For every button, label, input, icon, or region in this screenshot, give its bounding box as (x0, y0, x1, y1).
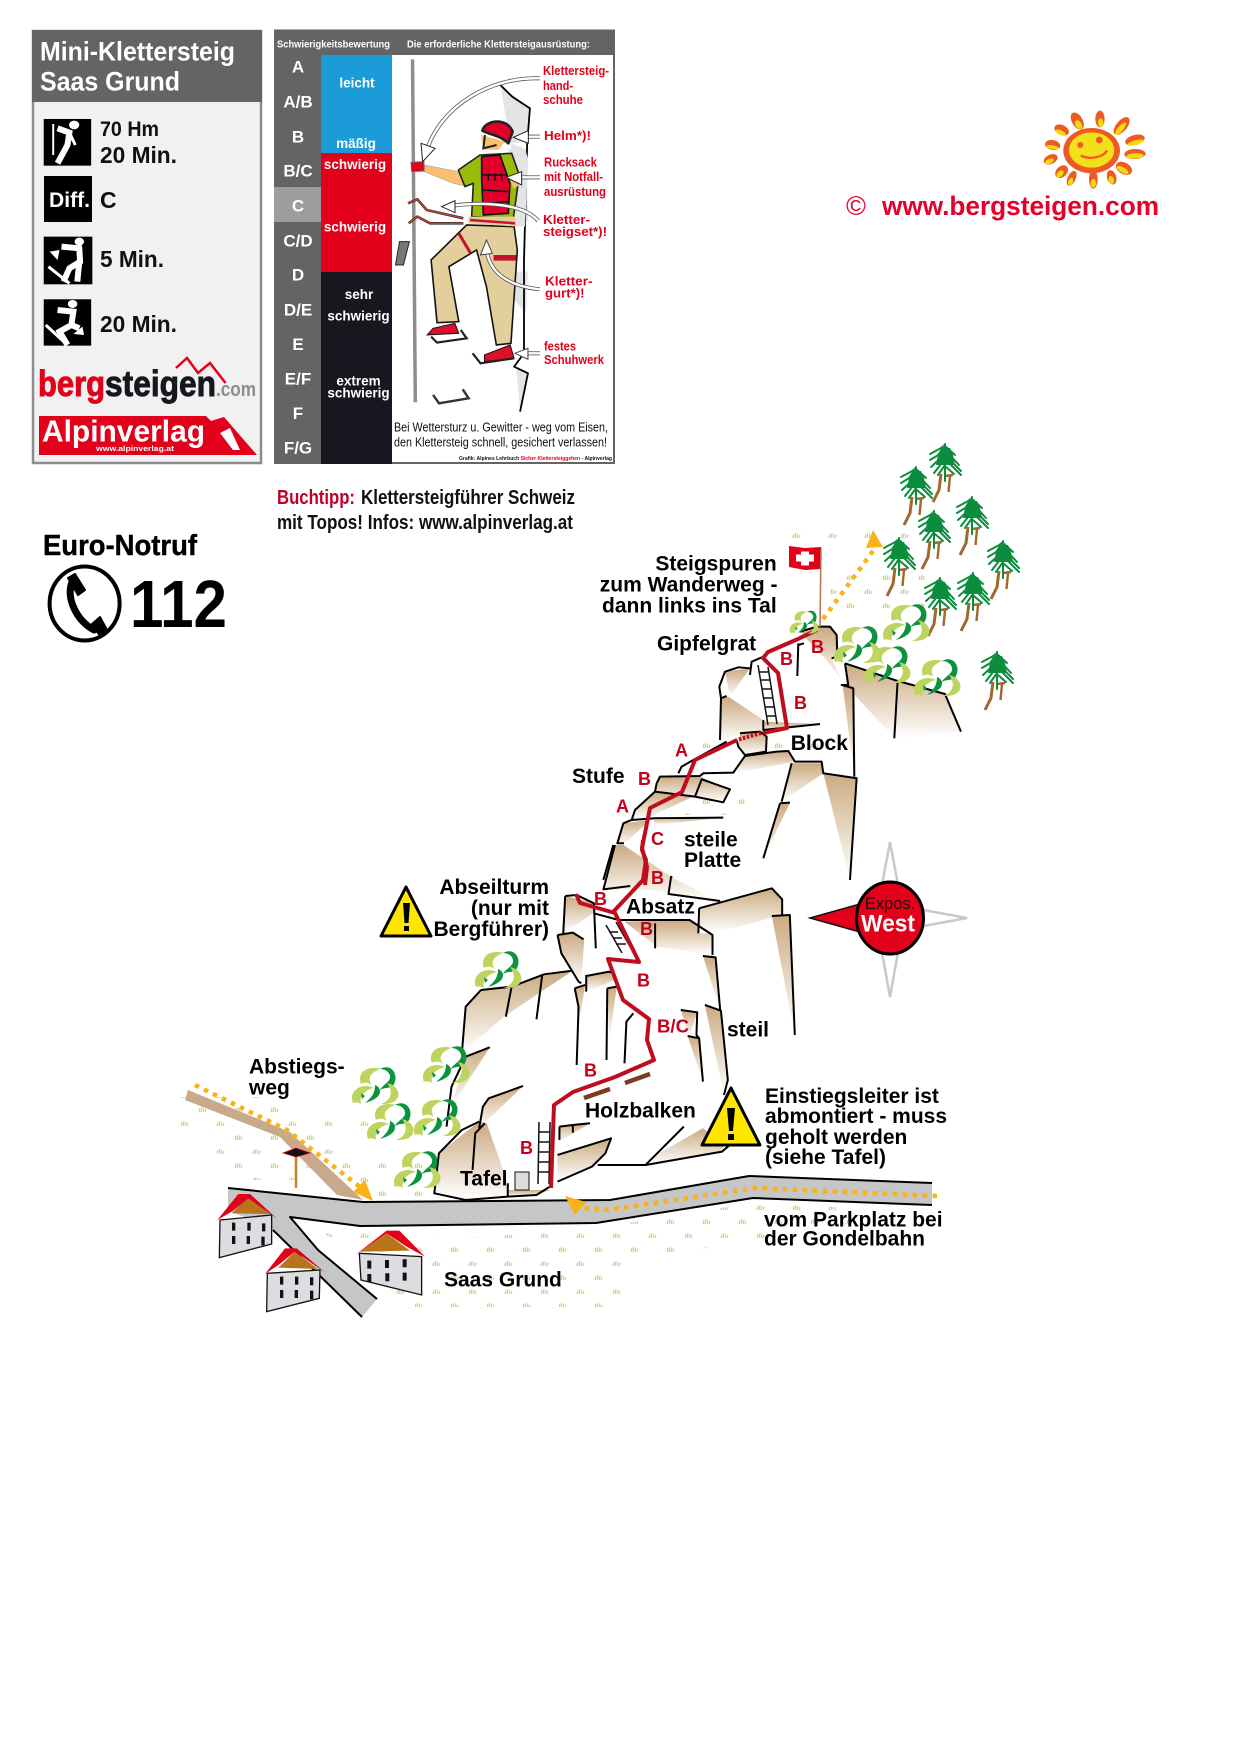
equipment labels: Helm*)! (544, 129, 591, 143)
icon: approach hiker (44, 237, 92, 284)
grade letters: F/G (284, 438, 312, 457)
compass: Expos. (865, 895, 915, 913)
book tip: Buchtipp: (277, 487, 355, 509)
icon: ascent climber (44, 119, 91, 166)
grade letters: E (292, 335, 304, 354)
sign board (515, 1172, 529, 1190)
logo: bergsteigen (38, 358, 256, 404)
warning: entry ladder (702, 1088, 760, 1145)
route grades: C (651, 829, 664, 849)
equipment labels: Kletter- (545, 275, 592, 289)
houses (217, 1194, 425, 1312)
grass areas (177, 525, 925, 1307)
grade letters: A/B (283, 92, 313, 111)
grade letters: C/D (283, 232, 313, 251)
equipment labels: festes (544, 340, 576, 354)
grade colour bands: schwierig (327, 309, 390, 324)
grade letters: B/C (283, 162, 313, 181)
book tip: mit Topos! Infos: www.alpinverlag.at (277, 512, 573, 534)
labels on topo: abmontiert - muss (765, 1105, 947, 1128)
logo: Alpinverlag: Alpinverlag (42, 414, 205, 449)
dotted arrow: summit to hiking path (823, 530, 883, 619)
scale header: Schwierigkeitsbewertung (277, 38, 390, 50)
labels on topo: Steigspuren (655, 553, 777, 576)
rock: upper section (603, 627, 962, 880)
labels on topo: geholt werden (765, 1126, 907, 1149)
route grades: B (811, 637, 824, 657)
labels on topo: Abstiegs- (249, 1055, 345, 1078)
route grades: B (584, 1061, 597, 1081)
labels on topo: zum Wanderweg - (600, 574, 778, 597)
grade colour bands: sehr (345, 287, 374, 302)
equipment labels: mit Notfall- (544, 170, 603, 184)
grade letters: D/E (284, 301, 312, 320)
ladders (538, 665, 777, 1184)
labels on topo: weg (248, 1076, 290, 1100)
route grades: B (794, 693, 807, 713)
book tip (277, 487, 575, 534)
equipment labels: gurt*)! (545, 287, 584, 301)
labels on topo: (siehe Tafel) (765, 1146, 886, 1169)
grade letters: F (293, 404, 303, 423)
labels on topo: Holzbalken (585, 1100, 696, 1123)
equipment labels: Kletter- (543, 213, 590, 227)
labels on topo: Bergführer) (433, 918, 549, 941)
labels on topo: steil (727, 1019, 769, 1042)
logo: bergsteigen: steigen (105, 363, 216, 404)
equipment labels (543, 64, 609, 367)
route grades: B (780, 649, 793, 669)
labels on topo: Gipfelgrat (657, 633, 756, 656)
labels on topo: Absatz (626, 895, 695, 918)
grade letters: C (292, 197, 304, 216)
icon: descent hiker (44, 299, 91, 346)
route grades: B (594, 889, 607, 909)
grade colour bands: schwierig (327, 386, 390, 401)
logo: Alpinverlag (39, 414, 257, 455)
route grades (520, 637, 824, 1158)
descent time: 20 Min. (100, 311, 177, 337)
route grades: B (520, 1138, 533, 1158)
approach time: 5 Min. (100, 246, 164, 272)
labels on topo: steile (684, 829, 738, 852)
route (551, 630, 817, 1188)
book tip: Klettersteigführer Schweiz (361, 487, 575, 509)
road (228, 1176, 932, 1317)
route grades: B (638, 769, 651, 789)
route grades: A (616, 797, 629, 817)
dotted arrow: approach from car park (565, 1188, 937, 1215)
descent path (185, 1090, 363, 1200)
grade colour bands (321, 55, 392, 464)
grade colour bands: leicht (339, 76, 375, 91)
emergency call: 112 (130, 567, 227, 642)
equipment labels: hand- (543, 79, 573, 93)
rock: lower section (434, 845, 795, 1200)
ascent text: 70 Hm (100, 118, 159, 141)
labels on topo (248, 553, 947, 1292)
labels on topo: Abseilturm (439, 876, 549, 899)
labels on topo: Platte (684, 849, 741, 872)
icon: difficulty (44, 176, 92, 222)
grade colour bands: extrem (336, 374, 381, 389)
current grade highlight (274, 187, 321, 222)
panel header: Mini-Klettersteig (40, 37, 235, 67)
compass: West (861, 911, 915, 938)
grade letters: E/F (285, 369, 311, 388)
panel header (32, 30, 262, 102)
labels on topo: dann links ins Tal (602, 595, 777, 618)
ascent text (100, 118, 177, 168)
grade letters (283, 58, 313, 457)
difficulty value: C (100, 187, 117, 213)
icon: difficulty: Diff. (49, 189, 90, 212)
equipment header: Die erforderliche Klettersteigausrüstung: (407, 38, 590, 50)
labels on topo: der Gondelbahn (764, 1228, 925, 1250)
route grades: B (651, 868, 664, 888)
dotted arrow: descent (195, 1085, 373, 1201)
route grades: A (675, 741, 688, 761)
signpost (283, 1148, 310, 1188)
equipment labels: schuhe (543, 93, 583, 107)
warning: abseil tower (381, 887, 431, 936)
logo: bergsteigen: .com (216, 379, 256, 401)
emergency call (43, 530, 227, 642)
storm warning text: den Klettersteig schnell, gesichert verlassen! (394, 435, 607, 450)
route grades: B (637, 971, 650, 991)
labels on topo: Block (791, 732, 848, 755)
flag (789, 546, 821, 627)
equipment labels: ausrüstung (544, 185, 606, 199)
panel: tour data (32, 30, 262, 463)
grade colour bands: schwierig (324, 220, 386, 235)
logo: bergsteigen: berg (38, 363, 105, 404)
storm warning text: Bei Wettersturz u. Gewitter - weg vom Eisen, (394, 420, 608, 435)
website: www.bergsteigen.com (881, 191, 1159, 221)
labels on topo: Einstiegsleiter ist (765, 1085, 939, 1108)
equipment white area (392, 55, 613, 462)
emergency call: Euro-Notruf (43, 530, 197, 562)
ascent text: 20 Min. (100, 142, 177, 168)
bushes (352, 604, 961, 1188)
panel header: Saas Grund (40, 67, 180, 97)
wooden beams (584, 1074, 650, 1098)
labels on topo: Stufe (572, 765, 624, 788)
labels on topo: Tafel (460, 1168, 507, 1191)
equipment labels: steigset*)! (543, 225, 607, 239)
grade letters: A (292, 58, 304, 77)
grade colour bands: mäßig (336, 136, 376, 151)
equipment labels: Rucksack (544, 156, 597, 170)
labels on topo: vom Parkplatz bei (764, 1209, 943, 1232)
route grades: B/C (657, 1017, 689, 1037)
equipment labels: Klettersteig- (543, 64, 609, 78)
climber illustration (396, 59, 540, 412)
panel: difficulty scale and equipment (274, 30, 615, 464)
logo: Alpinverlag: www.alpinverlag.at (95, 444, 175, 453)
website: © (846, 191, 866, 221)
equipment labels: Schuhwerk (544, 353, 604, 367)
grade colour bands: schwierig (324, 157, 386, 172)
labels on topo: (nur mit (471, 897, 549, 920)
labels on topo: Saas Grund (444, 1269, 562, 1292)
icon: phone (50, 566, 120, 640)
grade letters: B (292, 128, 304, 147)
icon: sun (1042, 110, 1146, 189)
graphic credit: Grafik: Alpines Lehrbuch Sicher Klettersteiggehen - Alpinverlag (459, 456, 612, 462)
grade letters: D (292, 266, 304, 285)
trees (884, 443, 1019, 710)
storm warning text (394, 420, 608, 450)
compass (810, 842, 967, 997)
route grades: B (640, 919, 653, 939)
